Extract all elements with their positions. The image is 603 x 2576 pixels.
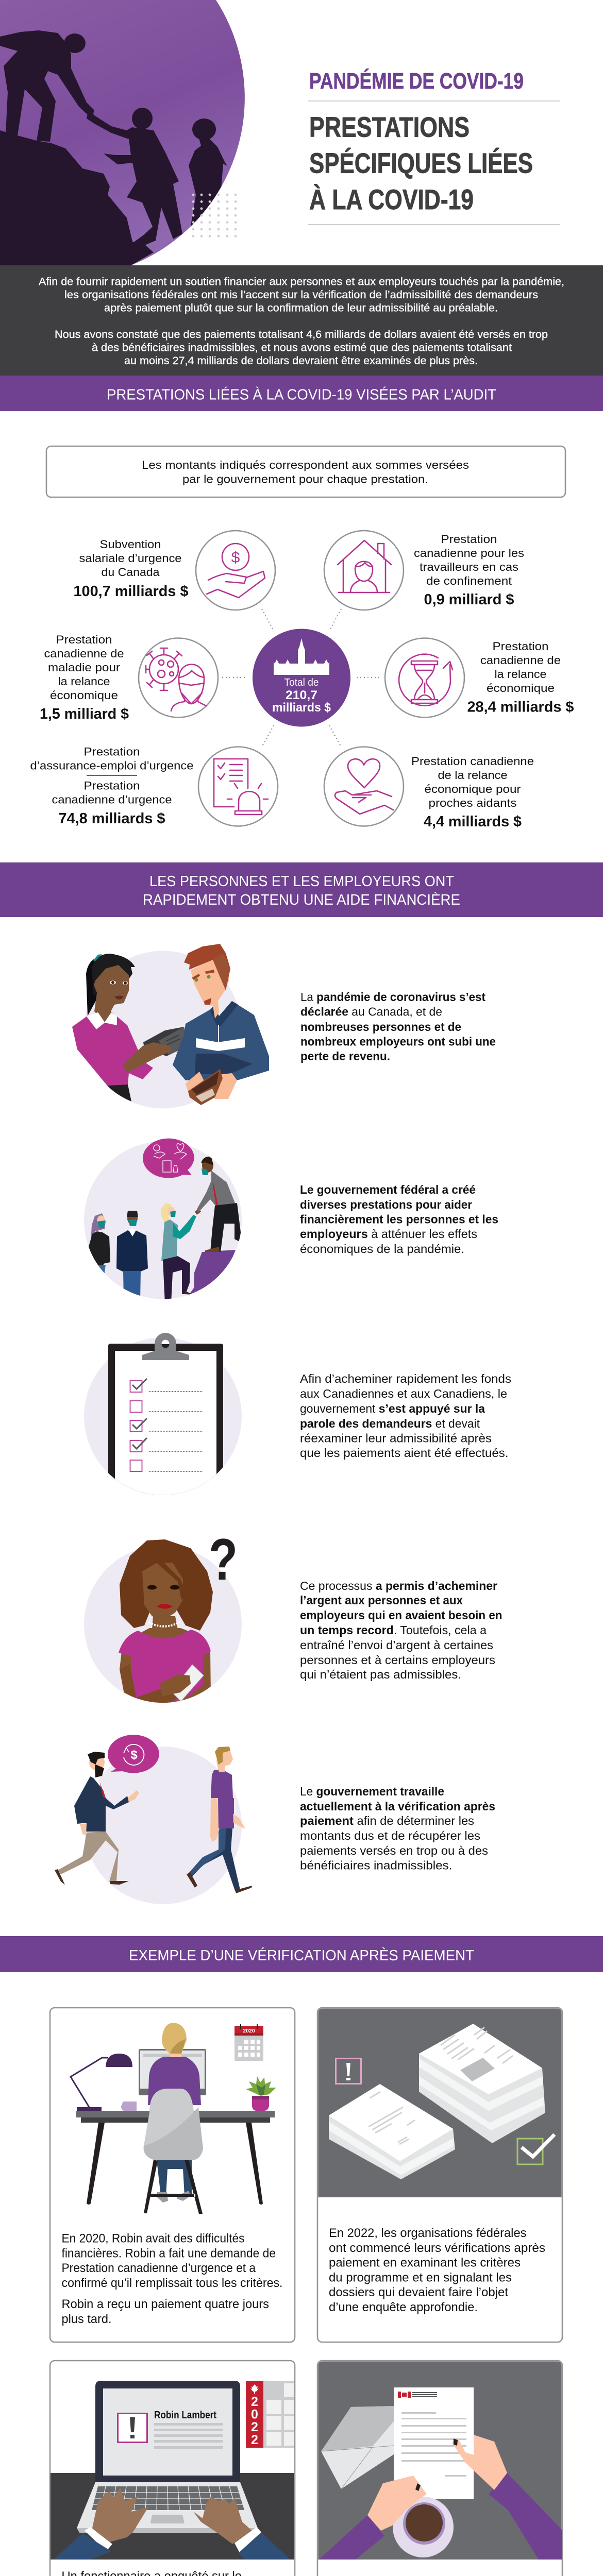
header: hero illustration [0,0,245,265]
card 4: letter [317,2361,562,2576]
illustration: laptop with Robin Lambert file [51,2381,294,2560]
text: federal government created benefits: diverses prestations pour aider [300,1198,472,1211]
centre total: milliards $ [272,701,331,715]
text: relied on applicants: gouvernement s’est appuyé sur la [300,1402,485,1415]
text: relied on applicants: parole des demandeurs et devait [300,1417,480,1430]
illustration: official pursuing man for repayment [55,1735,252,1904]
section banner: benefits audited: PRESTATIONS LIÉES À LA COVID-19 VISÉES PAR L’AUDIT [107,386,496,403]
text: record time: l’argent aux personnes et aux [300,1594,463,1607]
benefit: employment insurance and emergency: canadienne d’urgence [52,793,172,806]
icon: question mark: ? [209,1527,238,1592]
text: post-payment verification: montants dus et de récupérer les [300,1829,480,1842]
section banner: benefits audited [0,376,603,411]
card 3: investigation [50,2361,295,2576]
benefit: sickness: maladie pour [48,661,120,674]
speech bubble with dollar: $ [130,1748,138,1762]
main title: À LA COVID-19 [309,183,474,215]
benefit: sickness: la relance [58,675,110,688]
text: record time: personnes et à certains employeurs [300,1653,495,1667]
dot pattern [192,194,237,238]
intro text: Nous avons constaté que des paiements totalisant 4,6 milliards de dollars avaient été versés en trop [55,329,548,341]
note box: par le gouvernement pour chaque prestation. [182,473,428,485]
icon: coin in hand [207,544,265,598]
icon: parliament [274,638,329,675]
centre total: 210,7 [286,688,317,702]
icon: virus and masked person [146,648,206,711]
text: relied on applicants [300,1372,511,1460]
benefit: caregiving: proches aidants [429,796,516,809]
text: post-payment verification: actuellement à la vérification après [300,1800,495,1813]
benefit: lockdown: Prestation [441,533,497,546]
benefit: caregiving: Prestation canadienne [411,755,534,768]
note box: Les montants indiqués correspondent aux sommes versées [142,459,469,471]
benefit: recovery: Prestation [493,640,548,653]
text: pandemic declared: perte de revenu. [300,1049,390,1063]
benefit: wage subsidy: salariale d’urgence [79,552,181,565]
text: pandemic declared: nombreuses personnes et de [300,1020,461,1033]
text: federal government created benefits: économiques de la pandémie. [300,1242,464,1256]
speech bubble with benefit icons [143,1139,194,1178]
text: record time: un temps record. Toutefois, cela a [300,1623,487,1637]
text: record time: employeurs qui en avaient besoin en [300,1608,502,1622]
benefit: employment insurance and emergency: 74,8 milliards $ [59,810,165,827]
benefit: wage subsidy [73,531,275,610]
text: record time: qui n’étaient pas admissibles. [300,1668,461,1681]
text: du programme et en signalant les [329,2271,512,2284]
text: relied on applicants: réexaminer leur admissibilité après [300,1431,492,1445]
illustration: laptop with Robin Lambert file: 2 [251,2433,258,2447]
benefit: wage subsidy: 100,7 milliards $ [73,583,189,600]
text: d’une enquête approfondie. [329,2300,478,2314]
intro text: à des bénéficiaires inadmissibles, et nous avons estimé que des paiements totalisant [92,342,512,353]
benefit: sickness: 1,5 milliard $ [40,706,129,722]
text: paiement en examinant les critères [329,2256,521,2270]
text: record time: entraîné l’envoi d’argent à certaines [300,1638,493,1652]
benefit: employment insurance and emergency: Prestation [83,779,140,792]
illustration: Robin at desk [71,2023,276,2214]
text: relied on applicants: que les paiements aient été effectués. [300,1446,508,1460]
text: financières. Robin a fait une demande de [62,2246,276,2261]
text: record time: Ce processus a permis d’acheminer [300,1579,497,1592]
benefit: wage subsidy: Subvention [100,538,161,551]
icon: hourglass with arrow [399,654,453,706]
silhouettes helping each other climb [0,30,227,265]
text: Robin a reçu un paiement quatre jours [62,2297,269,2311]
benefit: sickness: économique [50,689,118,702]
main title: SPÉCIFIQUES LIÉES [309,147,533,179]
illustration: laptop with Robin Lambert file: 2 [251,2395,258,2409]
illustration: laptop with Robin Lambert file: 0 [251,2407,258,2421]
intro panel [0,265,603,376]
benefit: recovery: canadienne de [480,654,561,667]
illustration: reading government letter with coffee [319,2362,562,2560]
intro text: après paiement plutôt que sur la confirmation de leur admissibilité au préalable. [104,302,498,314]
benefit: caregiving: de la relance [438,769,507,782]
heading: pandemic label: PANDÉMIE DE COVID-19 [309,68,524,94]
text: federal government created benefits [300,1183,498,1256]
text: post-payment verification: bénéficiaires inadmissibles. [300,1859,453,1872]
text: pandemic declared: déclarée au Canada, et de [300,1005,442,1018]
main title [308,100,560,225]
benefit: sickness: canadienne de [44,647,124,660]
section banner: quick financial aid [0,862,603,917]
illustration: laptop with Robin Lambert file: 2 [251,2420,258,2434]
benefit: wage subsidy: du Canada [101,566,160,579]
text [329,2226,545,2314]
main title: PRESTATIONS [309,111,470,143]
benefit: lockdown [324,531,524,610]
text: federal government created benefits: employeurs à atténuer les effets [300,1227,477,1241]
text: federal government created benefits: financièrement les personnes et les [300,1213,498,1226]
section banner: quick financial aid: RAPIDEMENT OBTENU UNE AIDE FINANCIÈRE [143,891,460,908]
text: pandemic declared: nombreux employeurs ont subi une [300,1035,496,1048]
text: confirmé qu’il remplissait tous les critères. [62,2276,282,2290]
card 1: Robin applies in 2020 [50,2008,295,2342]
text: relied on applicants: Afin d’acheminer rapidement les fonds [300,1372,511,1385]
section banner: example: EXEMPLE D’UNE VÉRIFICATION APRÈS PAIEMENT [129,1947,474,1964]
benefit: caregiving [324,747,534,830]
illustration: clipboard checklist [84,1333,242,1504]
benefit: recovery: économique [487,682,555,694]
text: Prestation canadienne d’urgence et a [62,2261,256,2275]
intro text: Afin de fournir rapidement un soutien financier aux personnes et aux employeurs touchés par la pandémie, [39,276,564,287]
centre total: Total de [284,677,319,688]
benefit: recovery: 28,4 milliards $ [467,699,574,715]
benefit: caregiving: 4,4 milliards $ [424,814,522,830]
intro text [39,276,564,367]
illustration: Robin at desk: 2020 [243,2028,255,2034]
illustration: piles of documents [319,2008,562,2197]
speech bubble with dollar [108,1735,159,1773]
section banner: quick financial aid: LES PERSONNES ET LES EMPLOYEURS ONT [149,873,454,890]
centre total [253,629,350,726]
icon: coin in hand: $ [231,549,240,566]
text: En 2022, les organisations fédérales [329,2226,527,2240]
icon: person in house [338,540,391,592]
benefit: employment insurance and emergency: Prestation [83,745,140,758]
right man [187,1747,252,1893]
benefit: recovery [385,638,574,717]
illustration: questioning woman [84,1527,242,1705]
text: dossiers qui devaient faire l’objet [329,2285,508,2299]
card 2: post-payment review in 2022 [317,2008,562,2342]
benefit: sickness: Prestation [56,633,112,646]
note box [46,446,565,497]
text: federal government created benefits: Le gouvernement fédéral a créé [300,1183,476,1196]
section banner: example [0,1936,603,1972]
illustration: worried woman and man with empty wallet [72,944,269,1109]
intro text: les organisations fédérales ont mis l’accent sur la vérification de l’admissibilité des demandeurs [64,289,538,301]
benefit: employment insurance and emergency: d’assurance-emploi d’urgence [30,759,194,772]
icon: heart in hand [335,759,393,814]
left man [55,1752,139,1885]
benefit: employment insurance and emergency [30,745,278,827]
illustration: laptop with Robin Lambert file: Robin Lambert [154,2410,216,2421]
intro text: au moins 27,4 milliards de dollars devraient être examinés de plus près. [124,355,478,367]
benefit: lockdown: travailleurs en cas [420,561,518,573]
text: ont commencé leurs vérifications après [329,2241,545,2255]
text: post-payment verification: paiement afin de déterminer les [300,1814,474,1827]
text: post-payment verification: Le gouvernement travaille [300,1785,444,1798]
illustration: people climbing steps with help [84,1139,242,1303]
benefit: lockdown: canadienne pour les [414,547,524,560]
text: relied on applicants: aux Canadiennes et aux Canadiens, le [300,1387,507,1400]
benefit: lockdown: de confinement [426,574,512,587]
text: post-payment verification [300,1785,495,1872]
dotted connectors [222,609,381,747]
benefit: recovery: la relance [495,668,546,681]
text: record time [300,1579,502,1681]
icon: checklist with alarm [214,759,268,815]
text: En 2020, Robin avait des difficultés [62,2232,244,2245]
text: pandemic declared [300,990,496,1063]
text: post-payment verification: paiements versés en trop ou à des [300,1844,488,1857]
benefit: caregiving: économique pour [425,783,521,795]
purple circle [0,0,245,265]
text: pandemic declared: La pandémie de coronavirus s’est [300,990,485,1004]
text [62,2232,282,2326]
benefit: sickness [40,633,218,722]
text: plus tard. [62,2312,111,2326]
benefit: lockdown: 0,9 milliard $ [424,591,514,608]
